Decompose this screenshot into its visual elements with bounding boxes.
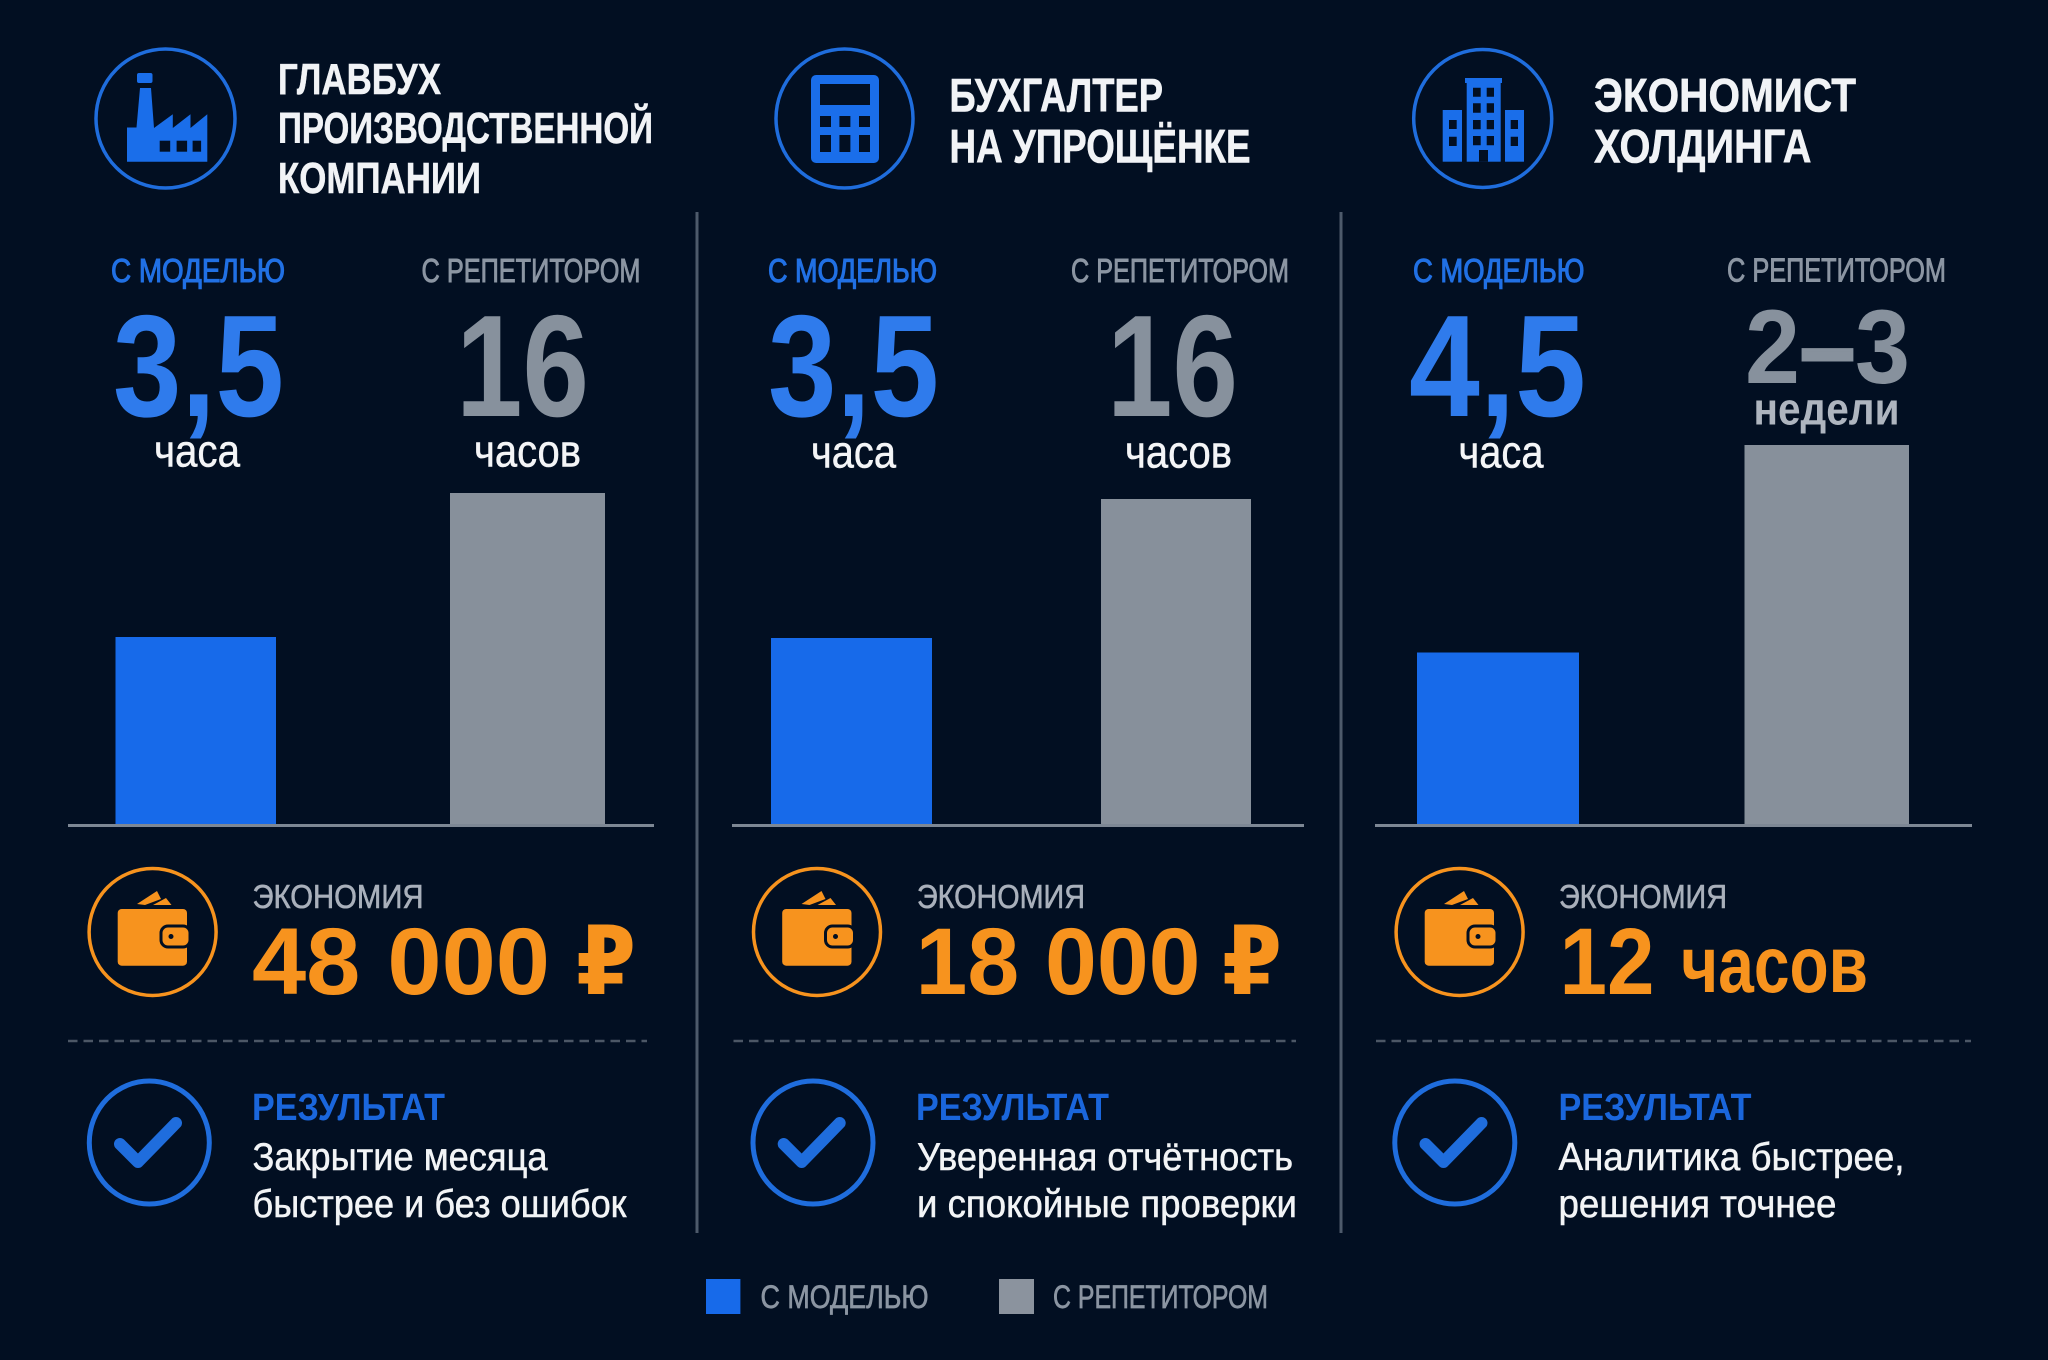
stat: with model: часа [811, 426, 897, 478]
result [89, 1081, 627, 1226]
heading: ЭКОНОМИСТ [1594, 68, 1856, 122]
icon: wallet [754, 868, 880, 996]
heading: ХОЛДИНГА [1594, 120, 1812, 172]
stat: with tutor: 2–3 [1745, 289, 1910, 406]
result: РЕЗУЛЬТАТ [252, 1087, 445, 1129]
savings: 18 000 [916, 909, 1200, 1015]
savings: ЭКОНОМИЯ [917, 878, 1085, 915]
result: решения точнее [1558, 1183, 1836, 1226]
heading: БУХГАЛТЕР [950, 68, 1163, 122]
icon: office buildings [1414, 50, 1552, 188]
stat: with model: С МОДЕЛЬЮ [111, 252, 285, 289]
bar chart [68, 493, 654, 827]
stat: with tutor [1071, 252, 1289, 478]
legend: С РЕПЕТИТОРОМ [1053, 1279, 1268, 1315]
stat: with tutor: С РЕПЕТИТОРОМ [1071, 252, 1289, 289]
savings: часов [1681, 920, 1868, 1009]
savings: ЭКОНОМИЯ [252, 878, 424, 915]
stat: with tutor: С РЕПЕТИТОРОМ [1727, 252, 1946, 288]
result: Закрытие месяца [252, 1136, 548, 1179]
result: и спокойные проверки [917, 1183, 1297, 1226]
stat: with model: 3,5 [113, 285, 284, 447]
result: РЕЗУЛЬТАТ [916, 1087, 1109, 1129]
panel: chief accountant [68, 49, 654, 1226]
stat: with model: С МОДЕЛЬЮ [768, 252, 937, 289]
icon: check [753, 1081, 873, 1204]
stat: with tutor: часов [474, 426, 581, 476]
panel: holding economist [1375, 50, 1972, 1226]
heading: КОМПАНИИ [278, 154, 481, 203]
result: Уверенная отчётность [917, 1136, 1293, 1179]
heading [1594, 68, 1856, 172]
icon: factory [96, 49, 235, 188]
legend: С МОДЕЛЬЮ [760, 1279, 928, 1315]
stat: with model [768, 252, 939, 478]
result: РЕЗУЛЬТАТ [1558, 1087, 1752, 1129]
heading [950, 68, 1250, 172]
icon: wallet [89, 868, 216, 996]
result [1395, 1081, 1904, 1226]
stat: with model: 3,5 [768, 285, 939, 447]
bar chart [732, 499, 1304, 827]
stat: with model [1409, 252, 1586, 478]
result: Аналитика быстрее, [1558, 1136, 1904, 1179]
stat: with tutor: недели [1754, 384, 1900, 434]
savings [89, 868, 636, 1015]
savings: 48 000 [252, 909, 550, 1015]
savings: 12 [1560, 909, 1654, 1015]
stat: with model: часа [1458, 426, 1544, 478]
stat: with model: С МОДЕЛЬЮ [1413, 252, 1584, 289]
stat: with tutor: 16 [1107, 285, 1238, 447]
savings [1396, 868, 1868, 1015]
savings [754, 868, 1282, 1015]
panel: accountant on simplified tax [732, 49, 1304, 1226]
stat: with tutor [422, 252, 640, 476]
legend [706, 1279, 1268, 1315]
heading [278, 55, 653, 203]
savings: ₽ [576, 909, 636, 1015]
heading: НА УПРОЩЁНКЕ [950, 120, 1250, 172]
result [753, 1081, 1297, 1226]
savings: ЭКОНОМИЯ [1559, 878, 1727, 915]
heading: ГЛАВБУХ [278, 55, 441, 104]
heading: ПРОИЗВОДСТВЕННОЙ [278, 102, 653, 153]
stat: with model [111, 252, 285, 476]
icon: calculator [776, 49, 913, 188]
stat: with model: часа [154, 426, 241, 476]
savings: ₽ [1222, 909, 1282, 1015]
stat: with tutor: часов [1125, 426, 1232, 478]
bar chart [1375, 445, 1972, 827]
stat: with tutor: С РЕПЕТИТОРОМ [422, 252, 640, 289]
stat: with tutor: 16 [456, 285, 589, 447]
icon: check [1395, 1081, 1515, 1204]
icon: check [89, 1081, 209, 1204]
icon: wallet [1396, 868, 1523, 996]
stat: with tutor [1727, 252, 1946, 434]
stat: with model: 4,5 [1409, 285, 1586, 447]
result: быстрее и без ошибок [252, 1183, 627, 1226]
